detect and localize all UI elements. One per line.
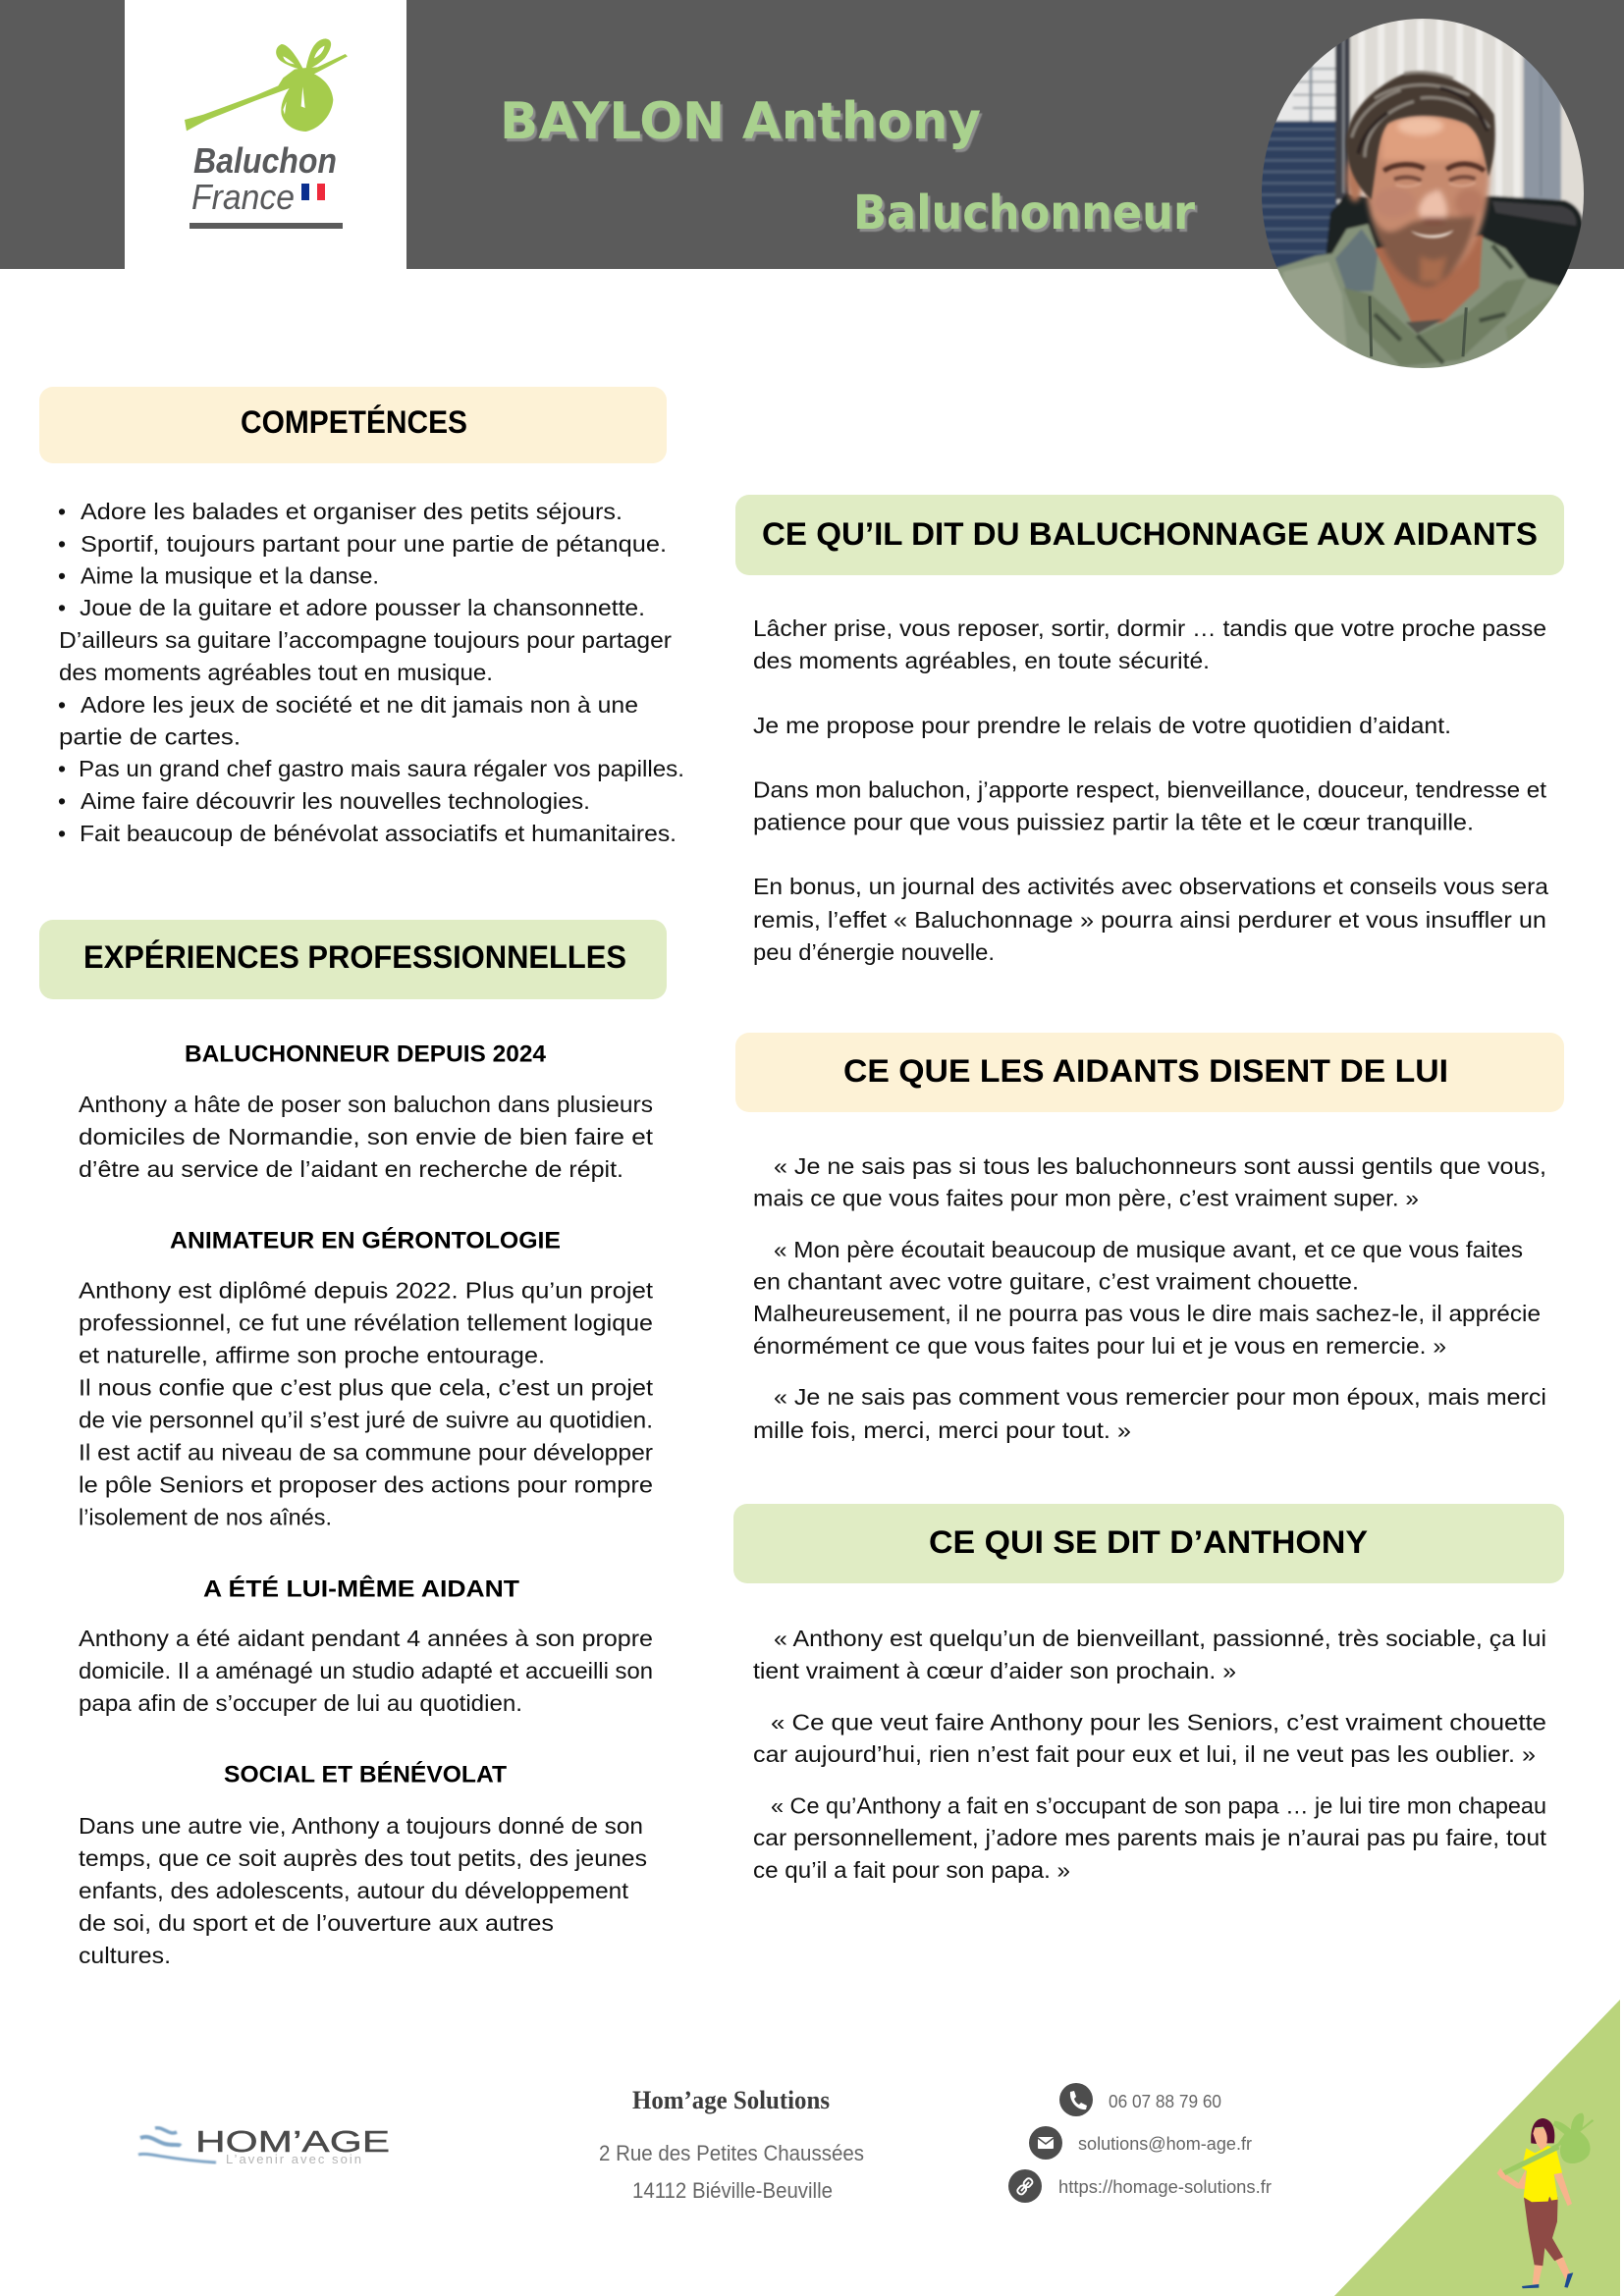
heading: EXPÉRIENCES PROFESSIONNELLES: EXPÉRIENCES PROFESSIONNELLES [83, 939, 626, 975]
list of skills: • [58, 563, 66, 589]
list of skills: Joue de la guitare et adore pousser la chansonnette. [80, 595, 645, 620]
bundle and stick [1503, 2113, 1594, 2175]
subtitle: role: Baluchonneur [853, 186, 1195, 240]
header band [0, 0, 1624, 269]
text block: Animateur: le pôle Seniors et proposer des actions pour rompre [79, 1472, 653, 1498]
quotes: caregivers: « Je ne sais pas comment vous remercier pour mon époux, mais merci [774, 1384, 1546, 1410]
icon: blue waves [138, 2128, 216, 2163]
illustration: woman walking with bundle [1497, 2113, 1594, 2288]
text block: Animateur: Il nous confie que c’est plus que cela, c’est un projet [79, 1374, 654, 1400]
street: 2 Rue des Petites Chaussées [599, 2141, 864, 2165]
icon: phone [1059, 2083, 1093, 2116]
quotes: caregivers [753, 1153, 1546, 1443]
chair [1326, 193, 1584, 294]
phone number: 06 07 88 79 60 [1109, 2092, 1221, 2111]
text block: social: cultures. [79, 1943, 171, 1968]
text block: Animateur: l’isolement de nos aînés. [79, 1504, 332, 1529]
list of skills: D’ailleurs sa guitare l’accompagne toujours pour partager [59, 627, 672, 653]
hair [1531, 2118, 1554, 2144]
heading: COMPETÉNCES: COMPETÉNCES [241, 404, 467, 440]
list of skills: • [58, 595, 66, 620]
quotes: said of Anthony: ce qu’il a fait pour son papa. » [753, 1857, 1070, 1883]
list of skills: Aime la musique et la danse. [81, 563, 379, 589]
text block: what he says: Lâcher prise, vous reposer, sortir, dormir … tandis que votre proche passe [753, 615, 1546, 641]
text block: Animateur: Anthony est diplômé depuis 2022. Plus qu’un projet [79, 1278, 654, 1304]
panel: professional experience [39, 920, 667, 1968]
email: solutions@hom-age.fr [1078, 2134, 1252, 2154]
text block: aidant [79, 1626, 653, 1716]
legs [1533, 2261, 1543, 2284]
shoes [1522, 2284, 1539, 2288]
list of skills: Aime faire découvrir les nouvelles technologies. [81, 788, 590, 814]
footer address [599, 2086, 864, 2203]
footer contacts [1008, 2083, 1272, 2203]
list of skills: Sportif, toujours partant pour une partie de pétanque. [81, 531, 667, 557]
text block: Animateur: Il est actif au niveau de sa commune pour développer [79, 1439, 653, 1465]
quotes: said of Anthony: tient vraiment à cœur d’aider son prochain. » [753, 1658, 1236, 1683]
heading: CE QU'IL DIT: CE QU’IL DIT DU BALUCHONNAGE AUX AIDANTS [762, 516, 1538, 552]
icon: French flag [301, 184, 325, 200]
stick front [1503, 2144, 1559, 2175]
list of skills: Pas un grand chef gastro mais saura régaler vos papilles. [79, 756, 684, 781]
logo underline [189, 223, 343, 229]
hood strings [1370, 296, 1466, 356]
text block: what he says: peu d’énergie nouvelle. [753, 939, 995, 965]
head [1533, 2128, 1548, 2151]
smile [1411, 230, 1454, 238]
list of skills: Adore les balades et organiser des petits séjours. [81, 499, 623, 524]
list of skills: • [58, 788, 66, 814]
heading: CE QUI SE DIT D'ANTHONY: CE QUI SE DIT D’ANTHONY [929, 1524, 1368, 1560]
text block: Baluchonneur: domiciles de Normandie, son envie de bien faire et [79, 1124, 654, 1149]
quotes: said of Anthony [753, 1626, 1547, 1883]
heading box: competences [39, 387, 667, 463]
subheading: A été lui-même aidant: A ÉTÉ LUI-MÊME AIDANT [203, 1575, 519, 1602]
heading: CE QUE LES AIDANTS DISENT DE LUI: CE QUE LES AIDANTS DISENT DE LUI [843, 1053, 1448, 1089]
arm back [1497, 2167, 1526, 2189]
icon: mail [1029, 2126, 1062, 2160]
list of skills: Fait beaucoup de bénévolat associatifs et humanitaires. [80, 821, 677, 846]
quotes: caregivers: énormément ce que vous faites pour lui et je vous en remercie. » [753, 1333, 1446, 1359]
logo text: France: France [191, 177, 295, 217]
text block: Baluchonneur: d’être au service de l’aidant en recherche de répit. [79, 1156, 623, 1182]
text block: what he says: remis, l’effet « Baluchonnage » pourra ainsi perdurer et vous insuffler un [753, 907, 1546, 933]
text block: what he says: des moments agréables, en toute sécurité. [753, 648, 1210, 673]
panel: what he says [735, 495, 1564, 965]
hair [1346, 73, 1495, 199]
list of skills: • [58, 692, 66, 718]
list of skills: • [58, 821, 66, 846]
text block: Animateur: professionnel, ce fut une révélation tellement logique [79, 1309, 653, 1335]
company name: Hom’age Solutions [632, 2086, 830, 2114]
list of skills: des moments agréables tout en musique. [59, 660, 493, 685]
hoodie [1276, 224, 1564, 373]
text block: Baluchonneur: Anthony a hâte de poser son baluchon dans plusieurs [79, 1092, 653, 1117]
list of skills [58, 499, 684, 846]
text block: what he says: patience pour que vous puissiez partir la tête et le cœur tranquille. [753, 809, 1474, 834]
quotes: caregivers: en chantant avec votre guitare, c’est vraiment chouette. [753, 1268, 1359, 1294]
subheading: Social et bénévolat: SOCIAL ET BÉNÉVOLAT [224, 1761, 507, 1789]
city: 14112 Biéville-Beuville [632, 2178, 833, 2203]
subheading: Baluchonneur depuis 2024: BALUCHONNEUR DEPUIS 2024 [185, 1041, 547, 1068]
quotes: said of Anthony: « Anthony est quelqu’un de bienveillant, passionné, très sociable, ça lui [774, 1626, 1546, 1651]
text block: what he says: Je me propose pour prendre le relais de votre quotidien d’aidant. [753, 713, 1451, 738]
brows and eyes [1383, 164, 1485, 171]
panel: competences [39, 387, 684, 846]
text block: what he says [753, 615, 1548, 965]
logo tagline: L’avenir avec soin [226, 2152, 361, 2166]
text block: social: temps, que ce soit auprès des tout petits, des jeunes [79, 1845, 647, 1871]
heading box: what he says [735, 495, 1564, 575]
text block: social: enfants, des adolescents, autour du développement [79, 1878, 629, 1903]
trousers [1524, 2197, 1563, 2266]
quotes: caregivers: Malheureusement, il ne pourra pas vous le dire mais sachez-le, il apprécie [753, 1301, 1541, 1326]
text block: what he says: Dans mon baluchon, j’apporte respect, bienveillance, douceur, tendresse et [753, 777, 1547, 803]
heading box: caregivers [735, 1033, 1564, 1112]
text block: aidant: domicile. Il a aménagé un studio adapté et accueilli son [79, 1658, 653, 1683]
text block: aidant: Anthony a été aidant pendant 4 années à son propre [79, 1626, 653, 1651]
icon: green bundle on a stick [185, 38, 348, 132]
face [1346, 111, 1489, 288]
list of skills: • [58, 499, 66, 524]
text block: aidant: papa afin de s’occuper de lui au quotidien. [79, 1690, 522, 1716]
quotes: said of Anthony: « Ce qu’Anthony a fait en s’occupant de son papa … je lui tire mon chapeau [771, 1792, 1546, 1818]
text block: social: de soi, du sport et de l’ouverture aux autres [79, 1910, 554, 1936]
logo text: Baluchon: Baluchon [193, 140, 337, 181]
logo: Baluchon France [125, 0, 406, 287]
panel: what caregivers say [735, 1033, 1564, 1443]
list of skills: • [58, 756, 66, 781]
green corner triangle [1334, 2000, 1620, 2296]
icon: link [1008, 2169, 1042, 2203]
quotes: caregivers: mais ce que vous faites pour mon père, c’est vraiment super. » [753, 1186, 1419, 1211]
panel: what is said of Anthony [733, 1504, 1564, 1883]
text block: social [79, 1813, 647, 1968]
shirt [1522, 2146, 1562, 2202]
text block: Animateur: de vie personnel qu’il s’est juré de suivre au quotidien. [79, 1408, 653, 1433]
quotes: caregivers: « Mon père écoutait beaucoup de musique avant, et ce que vous faites [774, 1237, 1523, 1262]
footer logo: HOM'AGE [138, 2124, 390, 2166]
heading box: experience [39, 920, 667, 999]
text block: Animateur: et naturelle, affirme son proche entourage. [79, 1343, 545, 1368]
list of skills: partie de cartes. [59, 724, 241, 750]
text block: what he says: En bonus, un journal des activités avec observations et conseils vous sera [753, 874, 1548, 899]
heading box: said of Anthony [733, 1504, 1564, 1583]
text block: social: Dans une autre vie, Anthony a toujours donné de son [79, 1813, 643, 1839]
logo wordmark: HOM’AGE [195, 2124, 390, 2159]
quotes: caregivers: mille fois, merci, merci pour tout. » [753, 1417, 1131, 1443]
quotes: said of Anthony: « Ce que veut faire Anthony pour les Seniors, c’est vraiment chouette [771, 1710, 1546, 1735]
quotes: said of Anthony: car aujourd’hui, rien n’est fait pour eux et lui, il ne veut pas les oublier. » [753, 1741, 1536, 1767]
quotes: said of Anthony: car personnellement, j’adore mes parents mais je n’aurai pas pu faire, tout [753, 1825, 1547, 1850]
subheading: Animateur en gérontologie: ANIMATEUR EN GÉRONTOLOGIE [170, 1227, 561, 1255]
title: name: BAYLON Anthony [500, 92, 981, 151]
website: https://homage-solutions.fr [1058, 2177, 1272, 2197]
list of skills: Adore les jeux de société et ne dit jamais non à une [81, 692, 638, 718]
background curtain [1334, 19, 1583, 261]
text block: Animateur [79, 1278, 654, 1529]
list of skills: • [58, 531, 66, 557]
photo portrait [1257, 13, 1591, 373]
text block: Baluchonneur [79, 1092, 654, 1182]
quotes: caregivers: « Je ne sais pas si tous les baluchonneurs sont aussi gentils que vous, [774, 1153, 1546, 1179]
